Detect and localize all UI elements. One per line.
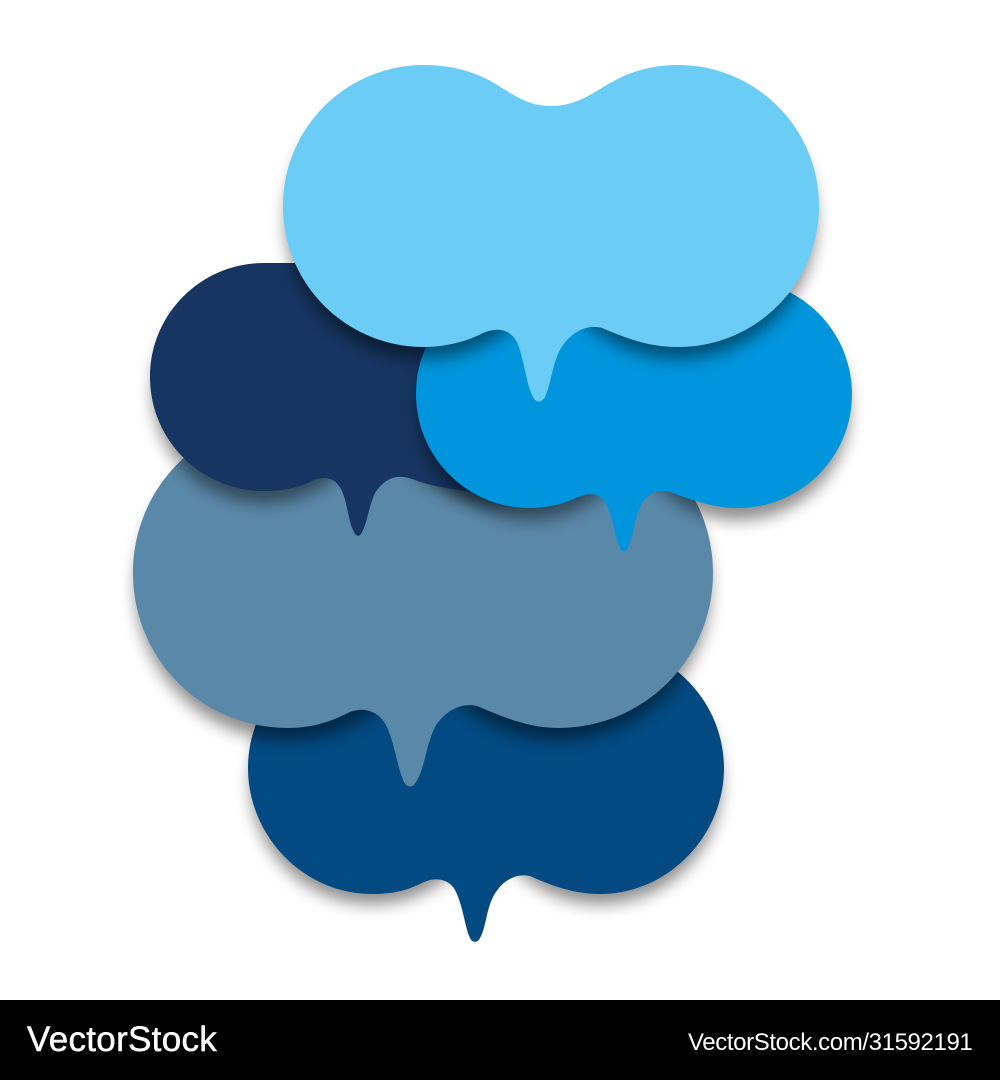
footer bar (0, 1000, 1000, 1080)
bubble: light blue top (283, 65, 819, 402)
bubble: navy (150, 263, 601, 536)
brand name: VectorStock (27, 1020, 217, 1059)
bubble: bright blue (416, 280, 852, 552)
image url: VectorStock.com/31592191 (688, 1029, 972, 1056)
bubble: steel blue (133, 418, 713, 786)
bubble: dark blue bottom (248, 644, 724, 942)
